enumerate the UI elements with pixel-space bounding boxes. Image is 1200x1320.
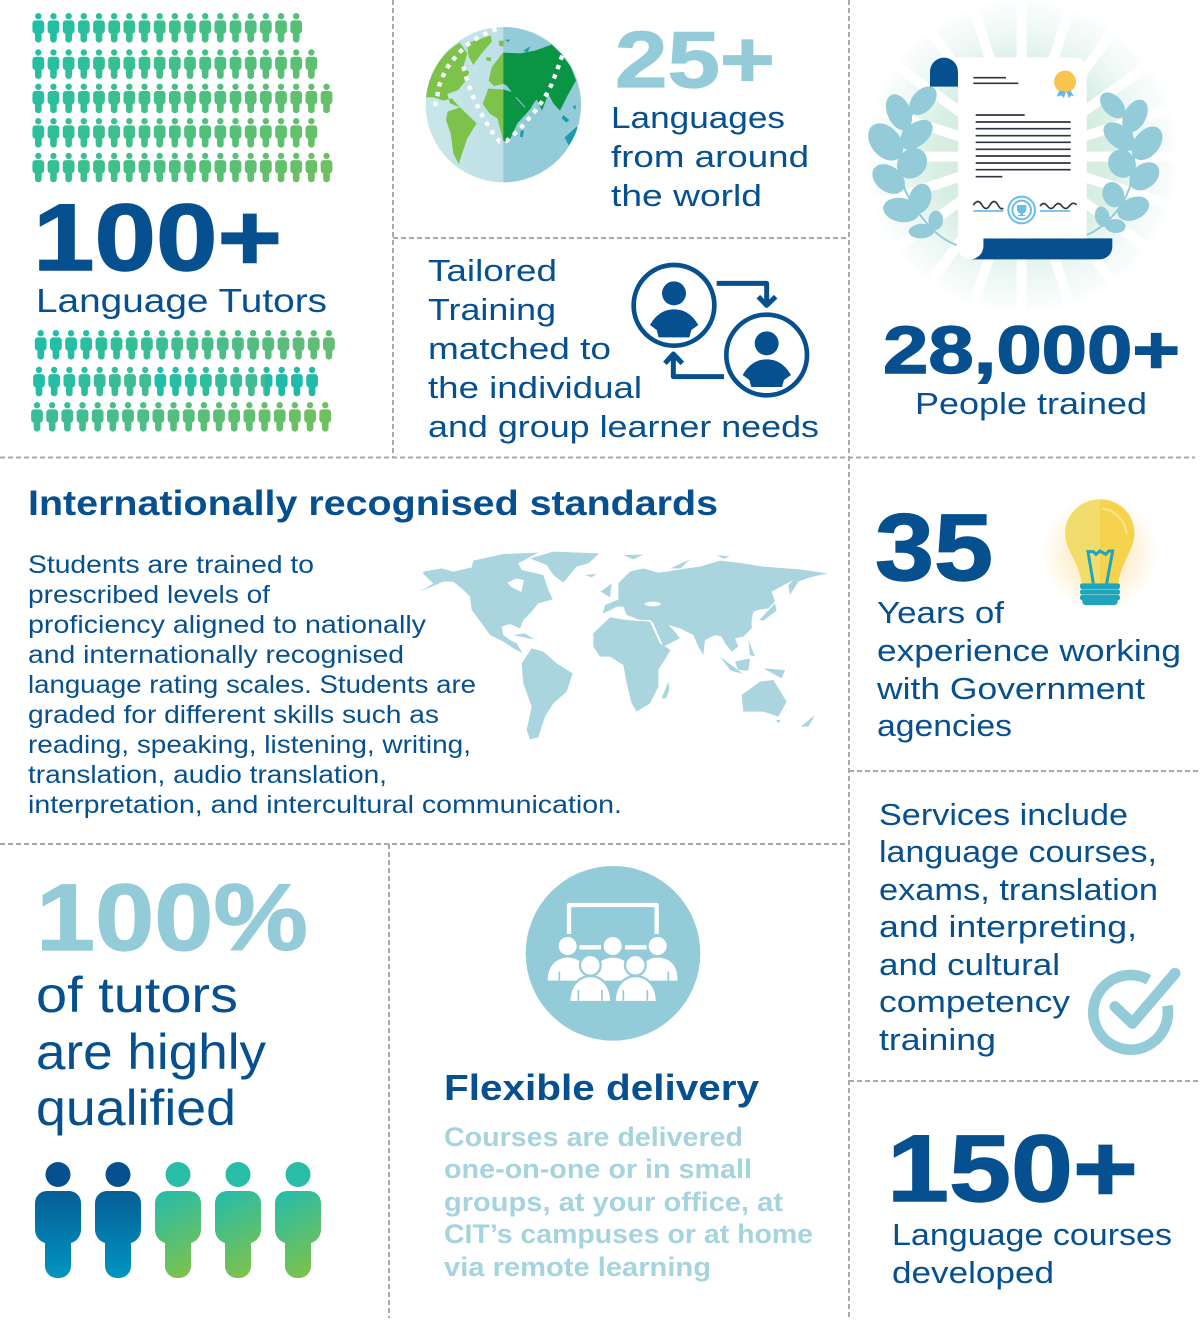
stat: 150+: 150+ xyxy=(887,1116,1138,1222)
text: standards paragraph: and internationally recognised xyxy=(28,641,404,669)
text: delivery description: CIT’s campuses or at home xyxy=(444,1219,813,1249)
text: languages from around the world xyxy=(611,100,809,213)
text: delivery description: one-on-one or in small xyxy=(444,1154,752,1184)
text: standards paragraph: graded for different skills such as xyxy=(28,701,439,729)
text: tailored training: the individual xyxy=(428,370,642,405)
text: tailored training: matched to xyxy=(428,331,611,366)
text: years of experience: Years of xyxy=(877,595,1004,630)
text: standards paragraph: prescribed levels of xyxy=(28,581,270,609)
label: language courses developed: developed xyxy=(892,1255,1054,1290)
text: years of experience: agencies xyxy=(877,708,1012,743)
text: delivery description: via remote learning xyxy=(444,1252,711,1282)
text: languages from around the world: from around xyxy=(611,139,809,174)
text: years of experience: experience working xyxy=(877,633,1181,668)
text: standards paragraph: Students are trained to xyxy=(28,551,314,579)
text: years of experience xyxy=(876,595,1181,743)
label: people trained: People trained xyxy=(915,386,1147,421)
text: services include xyxy=(879,797,1158,1057)
text: languages from around the world: the world xyxy=(611,178,762,213)
text: languages from around the world: Languages xyxy=(611,100,785,135)
heading: flexible delivery: Flexible delivery xyxy=(444,1067,759,1108)
heading: internationally recognised standards: Internationally recognised standards xyxy=(28,484,718,523)
stat: 100+: 100+ xyxy=(33,185,282,291)
text: services include: competency xyxy=(879,984,1071,1019)
text: of tutors are highly qualified: qualified xyxy=(36,1080,236,1136)
icon: lower group of tutor figures xyxy=(31,330,335,432)
stat: 25+: 25+ xyxy=(615,15,775,104)
text: tailored training: Tailored xyxy=(428,253,557,288)
icon: globe xyxy=(425,27,581,182)
icon: two people exchange xyxy=(634,265,807,395)
text: delivery description: groups, at your office, at xyxy=(444,1187,783,1217)
text: tailored training xyxy=(428,253,819,444)
text: services include: and interpreting, xyxy=(879,909,1137,944)
text: of tutors are highly qualified: are highly xyxy=(36,1024,266,1080)
text: tailored training: Training xyxy=(428,292,556,327)
text: services include: exams, translation xyxy=(879,872,1158,907)
text: standards paragraph: translation, audio translation, xyxy=(28,761,387,789)
text: delivery description: Courses are delivered xyxy=(444,1122,743,1152)
text: standards paragraph: language rating scales. Students are xyxy=(28,671,476,699)
text: years of experience: with Government xyxy=(876,671,1145,706)
text: tailored training: and group learner needs xyxy=(428,409,819,444)
text: standards paragraph: proficiency aligned to nationally xyxy=(28,611,427,639)
icon: light bulb xyxy=(1042,495,1158,612)
text: standards paragraph: interpretation, and intercultural communication. xyxy=(28,791,622,819)
text: services include: training xyxy=(879,1022,996,1057)
text: services include: and cultural xyxy=(879,947,1060,982)
text: of tutors are highly qualified xyxy=(36,967,266,1136)
text: standards paragraph xyxy=(28,551,622,819)
label: Language Tutors: Language Tutors xyxy=(36,282,327,319)
map: world map xyxy=(420,552,827,739)
text: of tutors are highly qualified: of tutors xyxy=(36,967,238,1023)
text: services include: language courses, xyxy=(879,834,1157,869)
stat: 28,000+: 28,000+ xyxy=(883,313,1180,388)
icon: certificate with laurels xyxy=(861,0,1178,313)
label: language courses developed: Language courses xyxy=(892,1217,1172,1252)
icon: classroom group xyxy=(526,866,700,1041)
label: language courses developed xyxy=(892,1217,1172,1290)
stat: 100%: 100% xyxy=(36,865,308,971)
icon: five qualified tutor figures xyxy=(35,1162,321,1278)
icon: top group of tutor figures xyxy=(32,13,332,182)
text: delivery description xyxy=(444,1122,813,1282)
text: services include: Services include xyxy=(879,797,1128,832)
stat: 35: 35 xyxy=(875,495,993,601)
text: standards paragraph: reading, speaking, listening, writing, xyxy=(28,731,471,759)
icon: check mark xyxy=(1093,973,1175,1050)
